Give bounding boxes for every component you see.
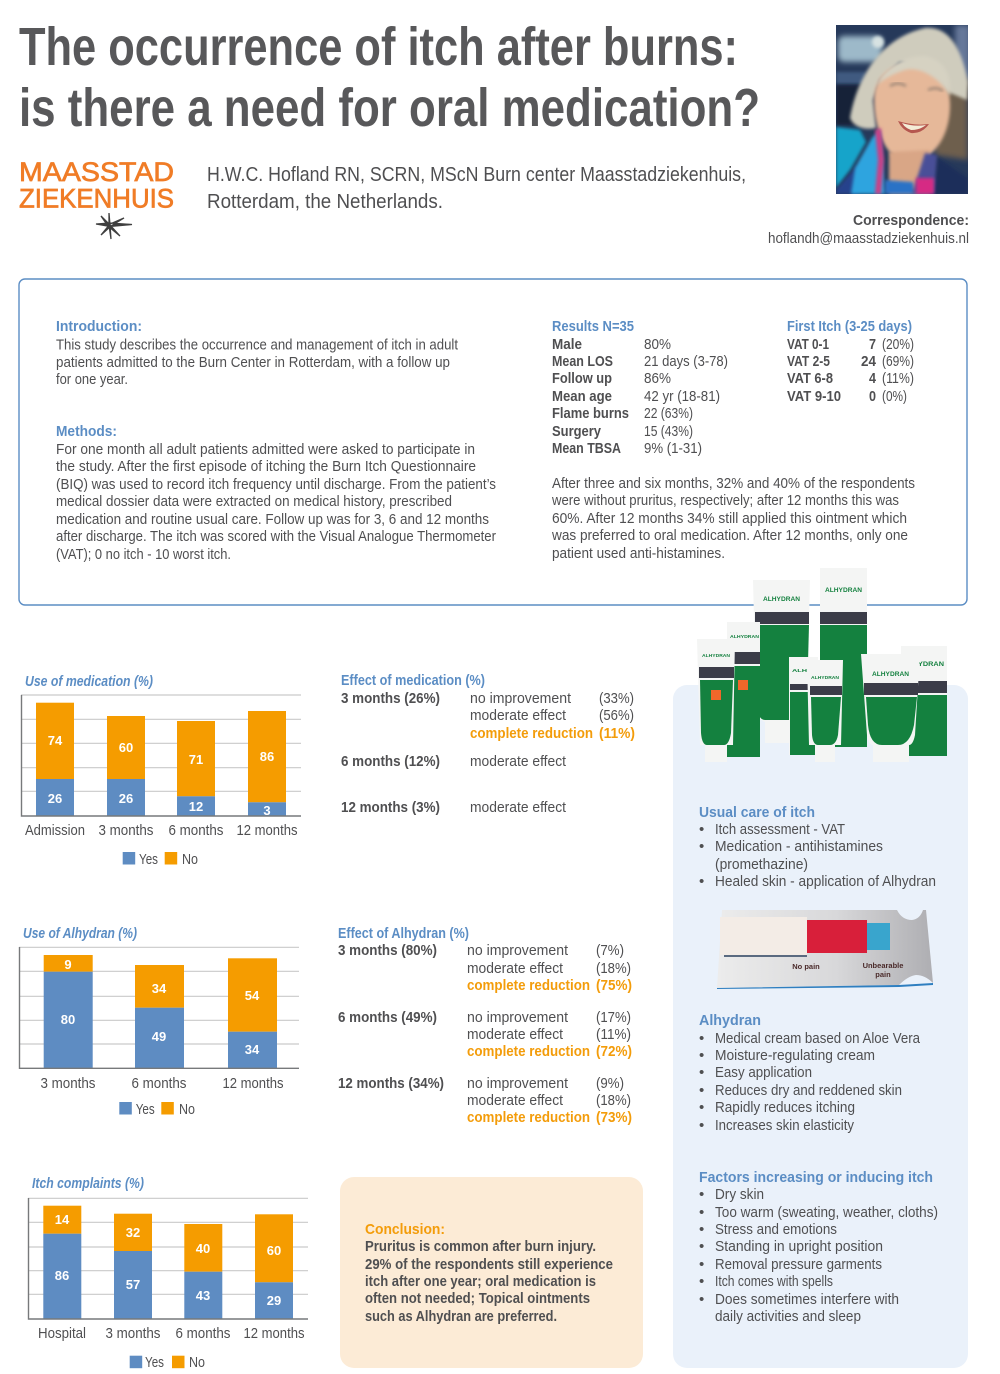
product photo: Alhydran tubes and boxes: ALHY: [792, 668, 812, 673]
results table: Surgery: [552, 423, 602, 440]
chart: itch complaints: 40: [196, 1241, 210, 1256]
text: effect of medication: 3 months (26%): [341, 690, 440, 707]
title: [19, 17, 760, 138]
methods text: (BIQ) was used to record itch frequency until discharge. From the patient’s: [56, 476, 496, 493]
chart: use of medication: Yes: [139, 851, 158, 868]
chart: use of medication: No: [182, 851, 198, 868]
illustration: visual analogue thermometer: Unbearable: [863, 961, 903, 970]
text: Alhydran properties: Rapidly reduces itching: [715, 1099, 855, 1116]
results table: 21 days (3-78): [644, 353, 728, 370]
text: Alhydran properties: •: [699, 1082, 704, 1099]
text: Alhydran properties: Reduces dry and reddened skin: [715, 1082, 902, 1099]
text: usual care of itch: Healed skin - application of Alhydran: [715, 873, 936, 890]
panel: conclusion: such as Alhydran are preferred.: [365, 1308, 557, 1325]
text: Alhydran properties: •: [699, 1064, 704, 1081]
results table: Flame burns: [552, 405, 629, 422]
chart: itch complaints: 57: [126, 1277, 140, 1292]
illustration: visual analogue thermometer: [717, 910, 933, 989]
product photo: Alhydran tubes and boxes: ALHYDRAN: [825, 587, 862, 594]
chart: use of medication: 3: [263, 803, 271, 818]
first itch table: VAT 6-8: [787, 370, 833, 387]
chart: itch complaints: Yes: [145, 1354, 164, 1371]
results paragraph: were without pruritus, respectively; after 12 months this was: [551, 492, 899, 509]
product photo: Alhydran tubes and boxes: ALHYDRAN: [730, 634, 759, 639]
text: effect of medication: Effect of medication (%): [341, 672, 485, 689]
chart: use of medication: 12: [189, 799, 203, 814]
text: factors increasing or inducing itch: daily activities and sleep: [715, 1308, 861, 1325]
text: Alhydran properties: Increases skin elasticity: [715, 1117, 854, 1134]
chart: use of medication: 71: [189, 752, 203, 767]
text: effect of Alhydran: complete reduction: [467, 1043, 590, 1060]
text: factors increasing or inducing itch: [699, 1169, 938, 1325]
text: effect of medication: moderate effect: [470, 707, 567, 724]
text: effect of Alhydran: moderate effect: [467, 1026, 564, 1043]
chart: use of medication: [21, 674, 301, 868]
chart: use of Alhydran: 54: [245, 988, 260, 1003]
text: factors increasing or inducing itch: •: [699, 1221, 704, 1238]
results table: 80%: [644, 336, 671, 353]
text: effect of Alhydran: (17%): [596, 1009, 631, 1026]
text: effect of medication: (56%): [599, 707, 634, 724]
results table: Results N=35: [552, 318, 634, 335]
text: usual care of itch: •: [699, 838, 704, 855]
text: factors increasing or inducing itch: Too warm (sweating, weather, cloths): [715, 1204, 938, 1221]
text: factors increasing or inducing itch: •: [699, 1256, 704, 1273]
text: effect of Alhydran: moderate effect: [467, 1092, 564, 1109]
chart: use of Alhydran: 34: [152, 981, 167, 996]
text: effect of Alhydran: no improvement: [467, 1009, 569, 1026]
text: factors increasing or inducing itch: Does sometimes interfere with: [715, 1291, 899, 1308]
chart: use of medication: 74: [48, 733, 63, 748]
title: The occurrence of itch after burns:: [19, 17, 738, 77]
results table: 22 (63%): [644, 405, 693, 422]
text: effect of Alhydran: 3 months (80%): [338, 942, 437, 959]
results paragraph: patient used anti-histamines.: [552, 545, 725, 562]
correspondence: hoflandh@maasstadziekenhuis.nl: [768, 230, 969, 247]
text: Alhydran properties: Medical cream based on Aloe Vera: [715, 1030, 921, 1047]
product photo: Alhydran tubes and boxes: ALHYDRAN: [811, 675, 839, 680]
panel: conclusion: Pruritus is common after burn injury.: [365, 1238, 596, 1255]
first itch table: [787, 318, 914, 405]
text: effect of Alhydran: (18%): [596, 1092, 631, 1109]
panel: conclusion: Conclusion:: [365, 1221, 445, 1238]
panel: usual care and factors background: [673, 685, 968, 1368]
results table: Follow up: [552, 370, 612, 387]
chart: use of medication: 86: [260, 749, 274, 764]
results table: Mean LOS: [552, 353, 613, 370]
text: factors increasing or inducing itch: •: [699, 1238, 704, 1255]
text: effect of Alhydran: (72%): [596, 1043, 632, 1060]
panel: conclusion: itch after one year; oral medication is: [365, 1273, 596, 1290]
text: effect of Alhydran: (9%): [596, 1075, 624, 1092]
chart: use of medication: 60: [119, 740, 133, 755]
panel: introduction, methods and results: [19, 279, 967, 605]
text: effect of Alhydran: complete reduction: [467, 977, 590, 994]
text: effect of Alhydran: (18%): [596, 960, 631, 977]
chart: itch complaints: 12 months: [244, 1325, 304, 1342]
first itch table: 4: [869, 370, 877, 387]
text: effect of Alhydran: moderate effect: [467, 960, 564, 977]
first itch table: 24: [861, 353, 877, 370]
authors: H.W.C. Hofland RN, SCRN, MScN Burn center Maasstadziekenhuis,: [207, 164, 746, 186]
results table: [552, 318, 728, 457]
chart: use of Alhydran: 12 months: [222, 1075, 284, 1092]
text: effect of medication: 12 months (3%): [341, 799, 440, 816]
text: factors increasing or inducing itch: •: [699, 1273, 704, 1290]
product photo: Alhydran tubes and boxes: YDRAN: [918, 662, 944, 668]
text: Alhydran properties: Alhydran: [699, 1012, 761, 1029]
text: Alhydran properties: Easy application: [715, 1064, 812, 1081]
chart: use of Alhydran: 49: [152, 1029, 166, 1044]
chart: use of Alhydran: Yes: [136, 1101, 155, 1118]
chart: use of Alhydran: 34: [245, 1042, 260, 1057]
text: effect of medication: moderate effect: [470, 753, 567, 770]
chart: itch complaints: No: [189, 1354, 205, 1371]
first itch table: First Itch (3-25 days): [787, 318, 912, 335]
text: Alhydran properties: Moisture-regulating cream: [715, 1047, 875, 1064]
chart: use of Alhydran: 6 months: [132, 1075, 186, 1092]
results table: 9% (1-31): [644, 440, 702, 457]
first itch table: VAT 0-1: [787, 336, 829, 353]
text: Alhydran properties: [699, 1012, 921, 1134]
methods text: the study. After the first episode of itching the Burn Itch Questionnaire: [56, 458, 476, 475]
chart: use of Alhydran: 9: [64, 957, 72, 972]
text: effect of Alhydran: [338, 925, 632, 1126]
authors: [207, 164, 746, 213]
text: effect of medication: complete reduction: [470, 725, 593, 742]
text: effect of medication: 6 months (12%): [341, 753, 440, 770]
methods text: [56, 423, 496, 563]
text: factors increasing or inducing itch: Itch comes with spells: [715, 1273, 833, 1290]
chart: use of medication: 3 months: [98, 822, 154, 839]
results table: 15 (43%): [644, 423, 693, 440]
text: factors increasing or inducing itch: Standing in upright position: [715, 1238, 883, 1255]
product photo: Alhydran tubes and boxes: ALHYDRAN: [702, 653, 730, 658]
text: effect of Alhydran: (7%): [596, 942, 624, 959]
product photo: Alhydran tubes and boxes: [697, 568, 947, 762]
chart: itch complaints: 32: [126, 1225, 140, 1240]
text: Alhydran properties: •: [699, 1030, 704, 1047]
text: effect of medication: (33%): [599, 690, 634, 707]
correspondence: Correspondence:: [853, 212, 969, 229]
product photo: Alhydran tubes and boxes: ALHYDRAN: [872, 671, 909, 678]
panel: conclusion: [340, 1177, 643, 1368]
product photo: Alhydran tubes and boxes: ALHYDRAN: [763, 596, 800, 603]
text: effect of Alhydran: (75%): [596, 977, 632, 994]
first itch table: 0: [869, 388, 876, 405]
text: effect of Alhydran: 12 months (34%): [338, 1075, 444, 1092]
text: effect of medication: (11%): [599, 725, 635, 742]
first itch table: VAT 9-10: [787, 388, 841, 405]
chart: itch complaints: 6 months: [176, 1325, 230, 1342]
chart: itch complaints: [28, 1176, 308, 1371]
methods text: (VAT); 0 no itch - 10 worst itch.: [56, 546, 231, 563]
results table: 42 yr (18-81): [644, 388, 720, 405]
chart: itch complaints: 3 months: [106, 1325, 160, 1342]
photo: portrait of author: [836, 25, 970, 194]
methods text: medication and routine usual care. Follow up was for 3, 6 and 12 months: [56, 511, 489, 528]
first itch table: VAT 2-5: [787, 353, 830, 370]
chart: use of medication: 6 months: [168, 822, 224, 839]
text: effect of medication: [341, 672, 635, 816]
text: Alhydran properties: •: [699, 1117, 704, 1134]
text: effect of medication: moderate effect: [470, 799, 567, 816]
text: factors increasing or inducing itch: •: [699, 1204, 704, 1221]
text: usual care of itch: •: [699, 873, 704, 890]
text: usual care of itch: Itch assessment - VAT: [715, 821, 845, 838]
text: factors increasing or inducing itch: •: [699, 1186, 704, 1203]
text: usual care of itch: •: [699, 821, 704, 838]
chart: itch complaints: 29: [267, 1293, 281, 1308]
methods text: medical dossier data were extracted on medical history, prescribed: [56, 493, 452, 510]
chart: use of medication: 26: [48, 791, 62, 806]
text: factors increasing or inducing itch: Stress and emotions: [715, 1221, 837, 1238]
text: Alhydran properties: •: [699, 1099, 704, 1116]
title: is there a need for oral medication?: [19, 78, 760, 138]
first itch table: (69%): [882, 353, 914, 370]
chart: use of medication: Admission: [25, 822, 85, 839]
chart: itch complaints: Hospital: [38, 1325, 86, 1342]
text: effect of Alhydran: Effect of Alhydran (%): [338, 925, 469, 942]
methods text: after discharge. The itch was scored with the Visual Analogue Thermometer: [56, 528, 496, 545]
chart: itch complaints: 14: [55, 1212, 70, 1227]
authors: Rotterdam, the Netherlands.: [207, 191, 443, 213]
illustration: visual analogue thermometer: No pain: [792, 962, 820, 971]
panel: conclusion: 29% of the respondents still experience: [365, 1256, 613, 1273]
introduction text: patients admitted to the Burn Center in Rotterdam, with a follow up: [56, 354, 450, 371]
chart: use of Alhydran: 80: [61, 1012, 75, 1027]
text: effect of medication: no improvement: [470, 690, 572, 707]
chart: use of Alhydran: Use of Alhydran (%): [23, 926, 137, 942]
chart: itch complaints: 43: [196, 1288, 210, 1303]
text: effect of Alhydran: 6 months (49%): [338, 1009, 437, 1026]
logo: Maasstad Ziekenhuis: [19, 157, 174, 239]
results paragraph: [551, 475, 915, 562]
logo: Maasstad Ziekenhuis: MAASSTAD: [19, 157, 174, 187]
results table: 86%: [644, 370, 671, 387]
text: factors increasing or inducing itch: Removal pressure garments: [715, 1256, 882, 1273]
chart: itch complaints: 86: [55, 1268, 69, 1283]
chart: use of Alhydran: 3 months: [40, 1075, 96, 1092]
text: usual care of itch: [699, 804, 936, 890]
chart: itch complaints: 60: [267, 1243, 281, 1258]
first itch table: (20%): [882, 336, 914, 353]
text: effect of Alhydran: no improvement: [467, 1075, 569, 1092]
methods text: For one month all adult patients admitted were asked to participate in: [56, 441, 475, 458]
text: effect of Alhydran: (11%): [596, 1026, 631, 1043]
results paragraph: After three and six months, 32% and 40% of the respondents: [552, 475, 915, 492]
introduction text: [56, 318, 459, 388]
text: usual care of itch: Medication - antihistamines: [715, 838, 883, 855]
panel: conclusion: often not needed; Topical ointments: [365, 1290, 590, 1307]
text: factors increasing or inducing itch: Dry skin: [715, 1186, 764, 1203]
logo: Maasstad Ziekenhuis: ZIEKENHUIS: [19, 184, 174, 214]
introduction text: Introduction:: [56, 318, 142, 335]
text: effect of Alhydran: no improvement: [467, 942, 569, 959]
first itch table: (11%): [882, 370, 914, 387]
introduction text: for one year.: [56, 371, 128, 388]
chart: use of medication: Use of medication (%): [25, 674, 153, 690]
results paragraph: was preferred to oral medication. After 12 months, only one: [551, 527, 908, 544]
first itch table: 7: [869, 336, 876, 353]
text: usual care of itch: (promethazine): [715, 856, 808, 873]
text: Alhydran properties: •: [699, 1047, 704, 1064]
chart: use of medication: 26: [119, 791, 133, 806]
text: factors increasing or inducing itch: •: [699, 1291, 704, 1308]
text: effect of Alhydran: complete reduction: [467, 1109, 590, 1126]
first itch table: (0%): [882, 388, 907, 405]
introduction text: This study describes the occurrence and management of itch in adult: [56, 336, 459, 354]
chart: use of Alhydran: [19, 926, 299, 1118]
text: effect of Alhydran: (73%): [596, 1109, 632, 1126]
chart: use of Alhydran: No: [179, 1101, 195, 1118]
text: usual care of itch: Usual care of itch: [699, 804, 815, 821]
results paragraph: 60%. After 12 months 34% still applied this ointment which: [552, 510, 907, 527]
methods text: Methods:: [56, 423, 117, 440]
correspondence: [768, 212, 969, 247]
text: factors increasing or inducing itch: Factors increasing or inducing itch: [699, 1169, 933, 1186]
results table: Mean age: [552, 388, 612, 405]
chart: itch complaints: Itch complaints (%): [32, 1176, 144, 1192]
illustration: visual analogue thermometer: pain: [875, 970, 891, 979]
results table: Mean TBSA: [552, 440, 621, 457]
chart: use of medication: 12 months: [236, 822, 298, 839]
results table: Male: [552, 336, 582, 353]
